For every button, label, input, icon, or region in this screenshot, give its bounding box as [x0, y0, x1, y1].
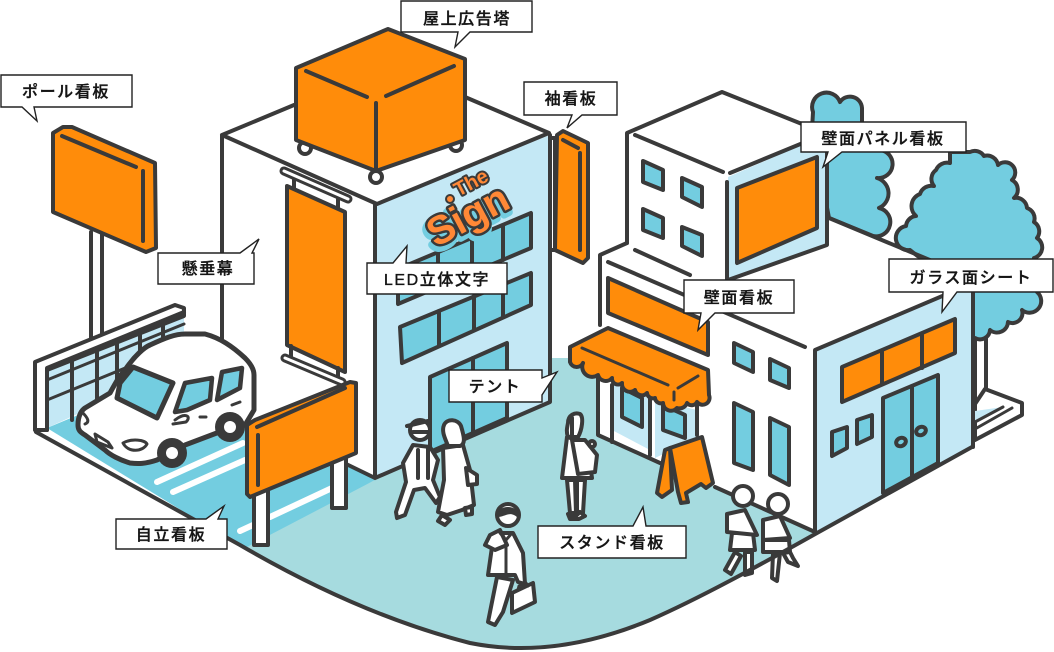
upper block — [627, 92, 827, 280]
rear window — [217, 368, 242, 400]
label: freestanding sign: 自立看板 — [136, 526, 206, 544]
label: pole sign: ポール看板 — [22, 83, 110, 101]
LED letters: Sign — [419, 176, 517, 256]
briefcase — [512, 583, 535, 613]
planter behind right building — [975, 389, 1022, 440]
label: glass sheet — [889, 259, 1053, 312]
label: awning: テント — [469, 379, 521, 396]
label: awning — [449, 370, 557, 402]
rooftop advertising tower — [296, 29, 465, 183]
ground edge line — [36, 432, 972, 648]
label: rooftop tower: 屋上広告塔 — [423, 10, 511, 28]
main building — [222, 97, 555, 478]
fence — [35, 305, 184, 430]
hanging banner — [284, 171, 348, 382]
left wall and roof — [222, 97, 547, 478]
wall panel sign — [737, 157, 817, 263]
wall sign — [608, 278, 708, 355]
glass wall — [817, 283, 973, 533]
right glass face — [375, 135, 550, 478]
wheels — [157, 438, 187, 468]
woman — [438, 445, 474, 515]
pedestrian: businessman — [485, 504, 535, 625]
tree: back right — [896, 151, 1042, 407]
stand sign — [657, 437, 713, 503]
label: pole sign — [1, 75, 132, 121]
small windows — [832, 427, 847, 456]
LED letters: The — [450, 165, 492, 201]
lower block windows — [734, 343, 753, 372]
shop front with awning — [570, 328, 710, 463]
LED letters: Sign — [418, 180, 515, 260]
pole sign — [53, 127, 156, 338]
bracket for projecting sign — [550, 138, 555, 250]
pedestrian: woman with backpack — [562, 413, 597, 519]
pedestrians: couple — [396, 420, 477, 525]
side window — [175, 378, 212, 412]
label: LED letters — [367, 246, 507, 294]
parking lot — [47, 385, 375, 548]
label: projecting sign — [524, 82, 617, 128]
man with cap — [396, 445, 440, 518]
right building — [600, 92, 973, 533]
label: hanging banner — [158, 239, 259, 284]
label: projecting sign: 袖看板 — [545, 90, 597, 108]
headlight and bumper — [82, 412, 147, 450]
window row 2 — [400, 273, 531, 363]
upper block windows — [643, 161, 663, 190]
label: wall panel sign — [801, 122, 966, 167]
window row 1 — [398, 213, 531, 304]
label: glass sheet: ガラス面シート — [910, 269, 1032, 287]
label: wall panel sign: 壁面パネル看板 — [821, 130, 945, 148]
windshield — [117, 367, 173, 418]
glass sheet sign — [842, 319, 955, 402]
label: wall sign — [684, 280, 794, 330]
label: LED letters: LED立体文字 — [384, 271, 490, 289]
label: wall sign: 壁面看板 — [704, 289, 774, 307]
entrance door — [430, 343, 507, 452]
label: hanging banner: 懸垂幕 — [182, 260, 234, 278]
car — [78, 334, 254, 468]
tree: back left — [812, 93, 893, 236]
label: stand sign: スタンド看板 — [559, 534, 665, 552]
label: rooftop tower — [401, 1, 532, 47]
projecting sign — [555, 131, 588, 263]
street ground — [240, 358, 817, 648]
awning — [570, 328, 710, 411]
double door — [883, 375, 938, 493]
label: stand sign — [538, 507, 686, 558]
pedestrians: schoolchildren — [725, 486, 798, 581]
freestanding sign — [247, 382, 356, 545]
label: freestanding sign — [116, 506, 227, 549]
lower block wall and roof — [600, 218, 973, 532]
